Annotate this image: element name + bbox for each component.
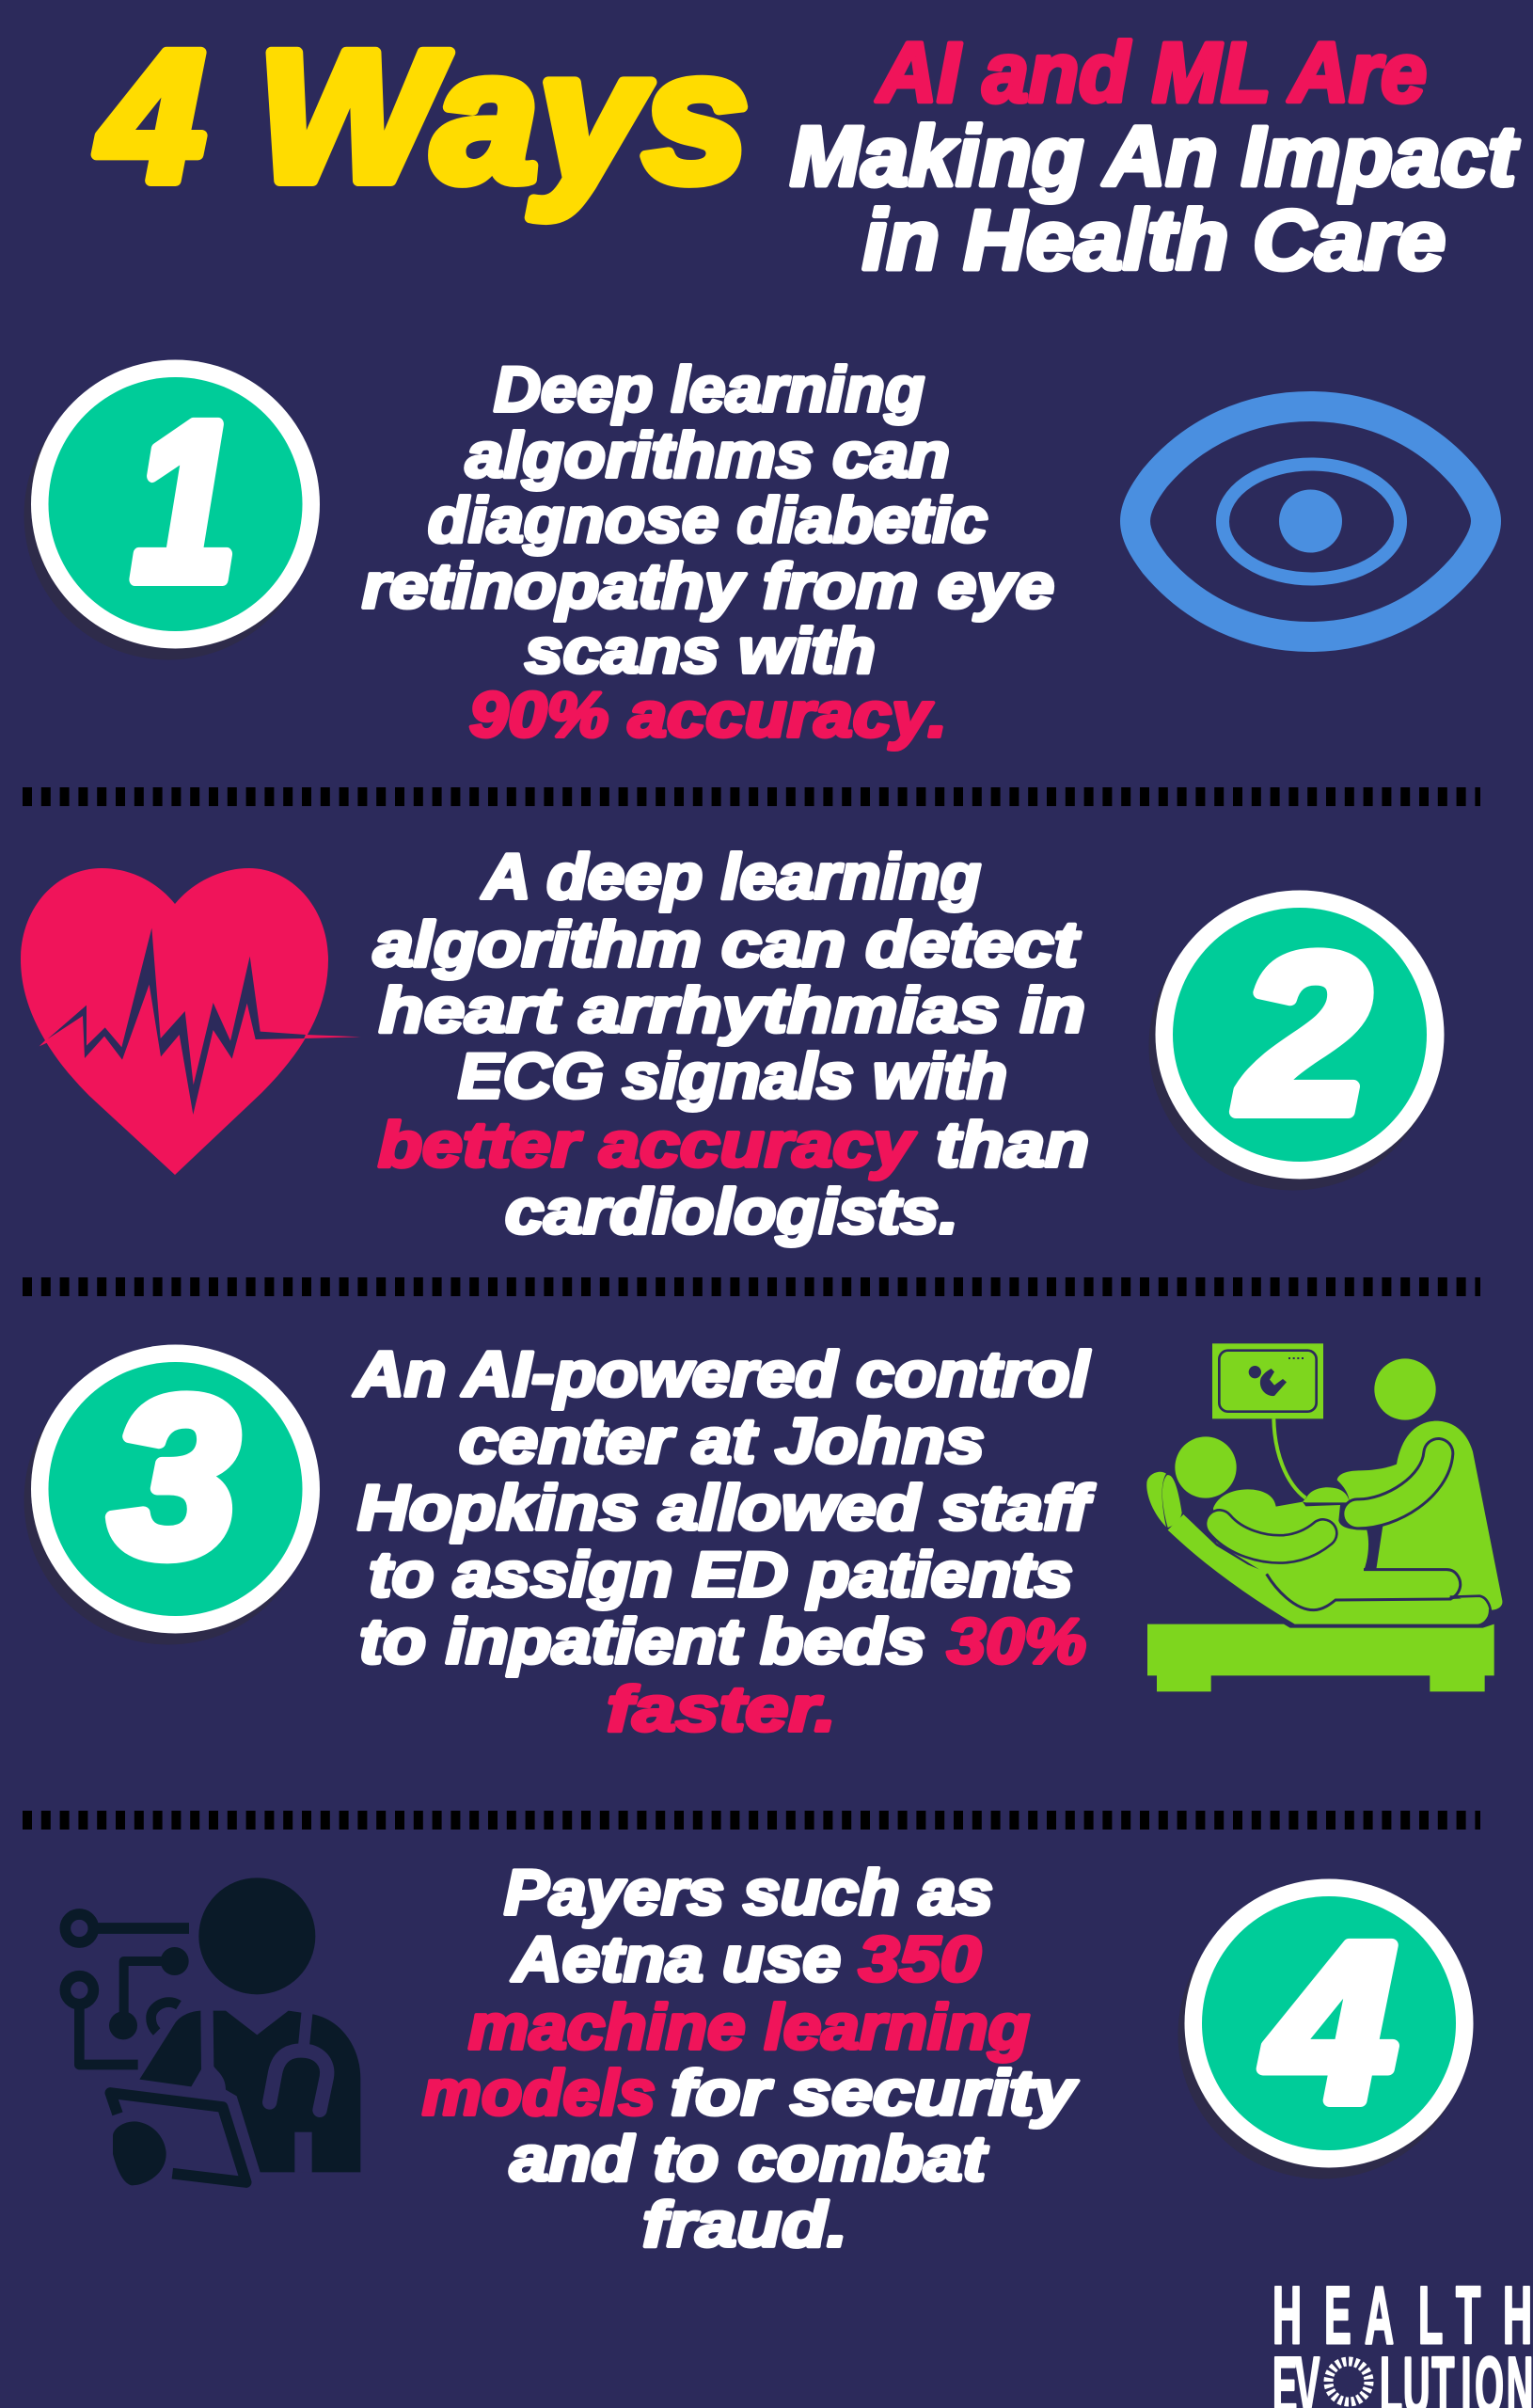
- text block 1: 90% accuracy.: [469, 679, 947, 751]
- subtitle: Making An Impact: [790, 110, 1520, 204]
- number badge 2: [1149, 890, 1445, 1191]
- number badge 2: 2: [1236, 908, 1369, 1160]
- number badge 1: 1: [132, 375, 237, 627]
- panel: item 4 payers: [65, 1857, 1474, 2260]
- text block 3: [353, 1339, 1096, 1745]
- ultrasound monitor: [1212, 1343, 1323, 1498]
- bed: [1147, 1624, 1494, 1691]
- text block 1: retinopathy from eye: [362, 550, 1054, 622]
- number badge 3: [24, 1345, 320, 1644]
- text block 3: center at Johns: [459, 1405, 985, 1477]
- icon: eye: [1135, 406, 1486, 637]
- text block 4: Payers such as: [504, 1857, 993, 1928]
- text block 1: diagnose diabetic: [428, 484, 988, 556]
- subtitle: [790, 26, 1520, 288]
- text block 3: to inpatient beds: [359, 1606, 925, 1677]
- number badge 1: [24, 359, 320, 660]
- text block 2: ECG signals with: [458, 1040, 1007, 1112]
- text block 4: models: [422, 2057, 656, 2129]
- number badge 3: 3: [110, 1351, 238, 1603]
- text block 4: Aetna use: [511, 1924, 841, 1995]
- number badge 4: 4: [1263, 1896, 1397, 2148]
- subtitle: in Health Care: [862, 194, 1446, 288]
- text block 2: A deep learning: [481, 841, 981, 912]
- text block 2: [373, 841, 1089, 1247]
- title: 4 Ways: 4 Ways: [96, 12, 749, 220]
- text block 1: scans with: [525, 615, 876, 687]
- text block 4: [422, 1857, 1079, 2260]
- text block 1: algorithms can: [466, 420, 950, 491]
- text block 3: to assign ED patients: [369, 1539, 1073, 1610]
- text block 3: faster.: [607, 1673, 836, 1745]
- text block 4: for security: [671, 2057, 1079, 2129]
- text block 1: [362, 354, 1054, 751]
- icon: heart with ECG line: [21, 868, 361, 1175]
- text block 2: better accuracy: [378, 1109, 917, 1180]
- logo: Health Evolution: [1272, 2271, 1533, 2408]
- logo: Health Evolution: HEALTH: [1272, 2271, 1532, 2361]
- sonographer: [1303, 1358, 1502, 1610]
- text block 4: machine learning: [468, 1991, 1030, 2063]
- panel: item 2 heart arrhythmias: [21, 841, 1445, 1247]
- text block 4: fraud.: [642, 2189, 847, 2260]
- text block 3: An AI-powered control: [353, 1339, 1091, 1410]
- patient: [1146, 1436, 1491, 1626]
- text block 1: Deep learning: [494, 354, 925, 425]
- number badge 4: [1177, 1879, 1473, 2178]
- text block 2: cardiologists.: [505, 1176, 958, 1247]
- title: [96, 12, 1520, 288]
- icon: ultrasound scan: [1146, 1343, 1502, 1691]
- text block 3: Hopkins allowed staff: [357, 1472, 1096, 1544]
- icon: doctor with circuit lines: [65, 1877, 360, 2185]
- text block 4: 350: [859, 1924, 981, 1995]
- sonographer front arm: [1357, 1453, 1438, 1513]
- text block 2: heart arrhythmias in: [379, 974, 1085, 1046]
- text block 4: and to combat: [510, 2123, 988, 2194]
- text block 3: 30%: [947, 1606, 1086, 1677]
- panel: item 1 diabetic retinopathy: [24, 354, 1486, 751]
- text block 2: algorithm can detect: [373, 909, 1081, 980]
- panel: item 3 control center: [24, 1339, 1502, 1745]
- subtitle: AI and ML Are: [876, 26, 1427, 120]
- text block 2: than: [936, 1109, 1089, 1180]
